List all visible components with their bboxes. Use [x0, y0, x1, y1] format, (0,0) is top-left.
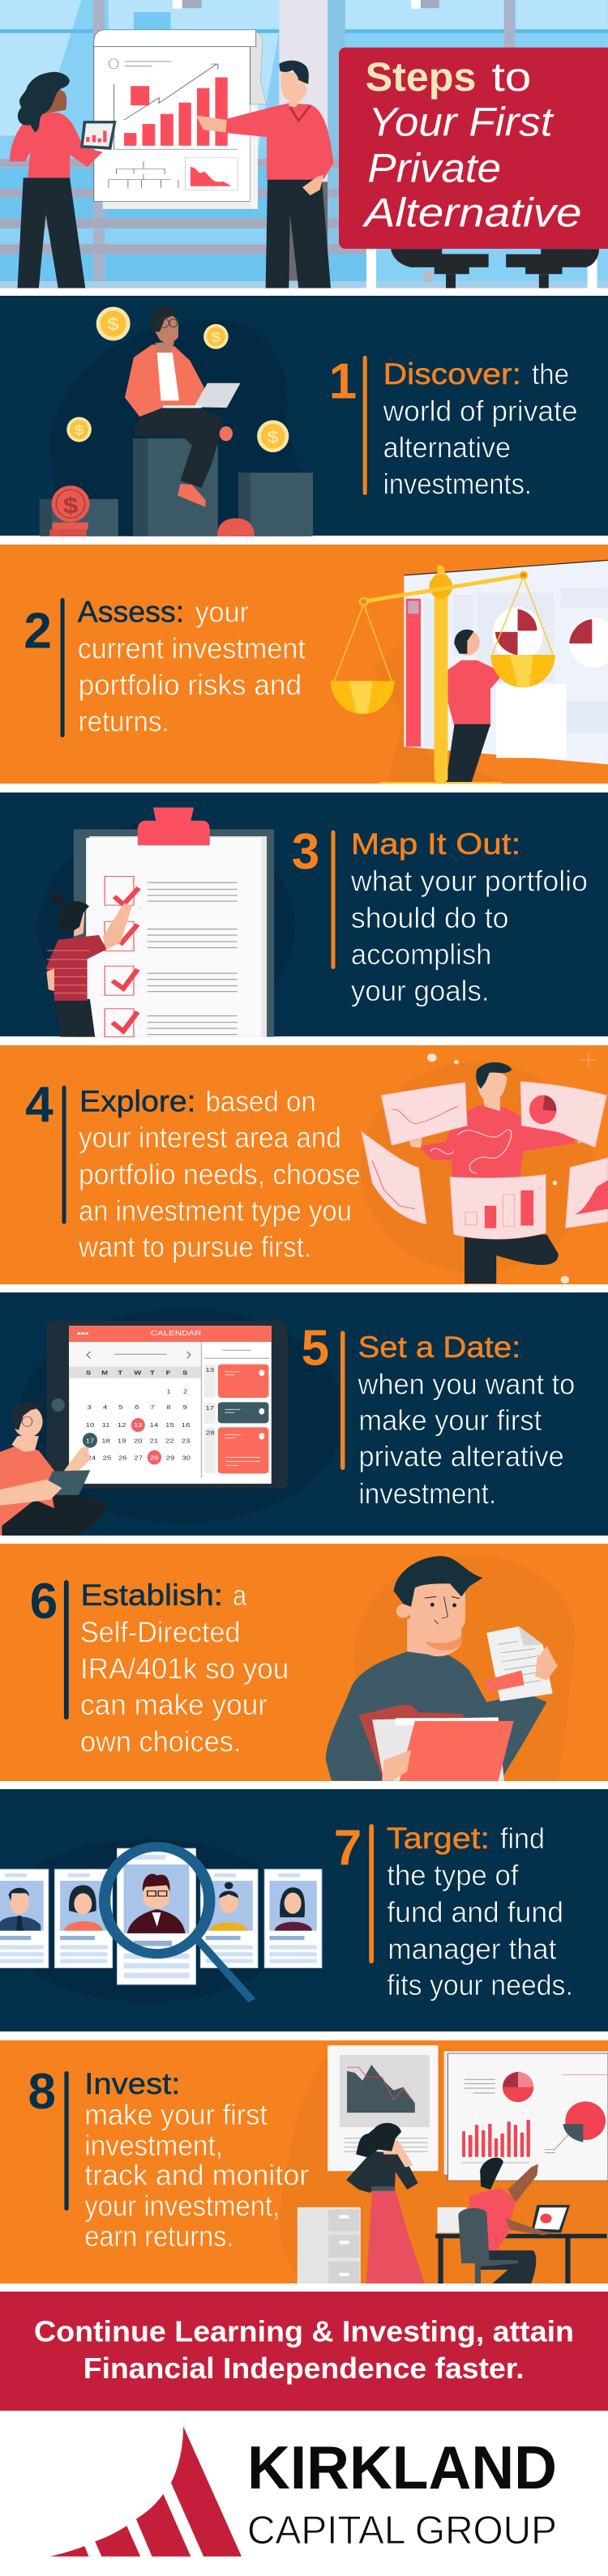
logo: Kirkland Capital Group	[49, 2427, 557, 2557]
calendar dates: 7	[150, 1403, 155, 1411]
text: target	[387, 1822, 573, 2001]
person 2	[64, 1886, 103, 1931]
text: establish: own choices.	[80, 1724, 242, 1758]
divider bar	[363, 356, 367, 495]
calendar dates: 20	[134, 1438, 143, 1444]
calendar day headers: T	[118, 1369, 123, 1376]
calendar dates: 30	[182, 1455, 191, 1461]
heading: title text	[362, 54, 582, 236]
text: explore: your interest area and	[79, 1121, 341, 1154]
divider bar	[62, 1086, 66, 1224]
text: assess: current investment	[78, 632, 306, 665]
text: invest	[84, 2067, 309, 2253]
text: invest: investment,	[84, 2129, 223, 2162]
calendar dates: 4	[103, 1403, 108, 1411]
panel: step 8 invest	[0, 2040, 608, 2283]
calendar dates: 19	[118, 1438, 126, 1444]
number 2: 2	[24, 604, 52, 660]
calendar day headers: M	[101, 1369, 108, 1376]
panel: step 3 map it out	[0, 792, 608, 1037]
illustration: calendar tablet	[0, 1309, 345, 1536]
divider bar	[331, 831, 336, 969]
text: invest: make your first	[84, 2098, 268, 2131]
text: map it out: your goals.	[351, 974, 490, 1007]
text: discover: alternative	[383, 430, 511, 464]
calendar dates: 11	[102, 1421, 110, 1429]
text: discover	[383, 357, 578, 501]
text: explore: want to pursue first.	[78, 1230, 311, 1263]
illustration: calendar tablet: CALENDAR	[151, 1330, 201, 1338]
text: set a date: private alterative	[358, 1440, 564, 1473]
number 5: 5	[302, 1321, 329, 1377]
text: explore: an investment type you	[79, 1194, 352, 1228]
text: set a date: Set a Date:	[358, 1331, 520, 1364]
calendar dates: 10	[86, 1421, 95, 1429]
calendar dates: 6	[135, 1403, 139, 1411]
text: discover: the	[532, 357, 569, 391]
text: establish: IRA/401k so you	[80, 1651, 289, 1685]
number 4: 4	[25, 1077, 54, 1133]
wordmark: KIRKLAND	[247, 2433, 557, 2501]
calendar dates: 3	[87, 1403, 92, 1411]
calendar day headers: T	[150, 1369, 156, 1376]
heading: title text: Private	[367, 145, 501, 190]
text: explore: based on	[206, 1084, 316, 1117]
panel: step 7 target	[0, 1789, 608, 2031]
text: map it out: Map It Out:	[351, 827, 520, 861]
text: assess	[78, 595, 306, 737]
text: closing message	[34, 2314, 574, 2385]
person 1	[0, 1888, 41, 1931]
number 7: 7	[334, 1821, 362, 1877]
text: target: fits your needs.	[387, 1968, 573, 2001]
heading: title text: Your First	[368, 99, 554, 144]
illustration: calendar tablet: 17	[205, 1404, 214, 1412]
text: set a date: make your first	[358, 1403, 542, 1437]
text: establish	[80, 1578, 289, 1758]
person 5	[275, 1887, 312, 1931]
illustration: checklist clipboard	[39, 807, 295, 1037]
text: target: Target:	[387, 1822, 490, 1855]
text: set a date: investment.	[358, 1476, 496, 1510]
text: map it out: should do to	[351, 901, 509, 934]
illustration: man with folders	[326, 1555, 575, 1781]
calendar dates: 15	[165, 1421, 174, 1429]
calendar dates: 8	[166, 1403, 171, 1411]
person center highlighted	[127, 1873, 186, 1933]
calendar dates: 25	[103, 1455, 112, 1461]
calendar dates	[86, 1388, 191, 1461]
calendar dates: 17	[86, 1438, 95, 1444]
calendar dates: 21	[150, 1438, 159, 1444]
illustration: investor on columns with coins: $	[75, 423, 84, 438]
calendar dates: 14	[150, 1421, 159, 1429]
number 1: 1	[329, 354, 357, 410]
text: discover: Discover:	[383, 357, 521, 391]
calendar dates: 2	[183, 1388, 188, 1395]
text: map it out: what your portfolio	[350, 865, 588, 898]
text: establish: Establish:	[81, 1578, 223, 1612]
number 6: 6	[30, 1574, 58, 1630]
panel: step 2 assess	[0, 545, 608, 784]
text: establish: a	[233, 1578, 247, 1612]
icon: chairs	[391, 249, 599, 288]
text: assess: portfolio risks and	[79, 668, 302, 701]
panel: step 4 explore	[0, 1045, 608, 1284]
calendar day headers: S	[86, 1369, 92, 1376]
divider bar	[369, 1824, 374, 1963]
text: invest: track and monitor	[84, 2159, 309, 2192]
illustration: investor on columns with coins: $	[107, 315, 119, 335]
calendar dates: 24	[88, 1455, 96, 1461]
text: target: manager that	[387, 1932, 556, 1966]
divider bar	[64, 1580, 69, 1719]
illustration: office with charts	[279, 2045, 608, 2283]
heading: title text: Steps	[366, 54, 476, 100]
illustration: man with floating charts	[361, 1053, 608, 1284]
text: invest: earn returns.	[84, 2219, 233, 2253]
calendar dates: 5	[118, 1403, 123, 1411]
man at laptop	[458, 2158, 570, 2283]
calendar dates: 16	[182, 1421, 191, 1429]
illustration: profiles and magnifier	[0, 1839, 322, 2002]
text: invest: Invest:	[84, 2067, 180, 2100]
panel: closing call to action	[0, 2292, 608, 2411]
calendar dates: 28	[150, 1455, 159, 1461]
woman with tablet	[10, 72, 116, 288]
text: target: find	[500, 1822, 545, 1855]
calendar day headers: W	[134, 1369, 141, 1376]
calendar dates: 9	[182, 1403, 187, 1411]
text: assess: Assess:	[78, 595, 184, 628]
illustration: investor on columns with coins	[40, 306, 313, 536]
divider bar	[340, 1331, 345, 1470]
text: closing message: Financial Independence faster.	[83, 2352, 525, 2385]
woman viewing chart	[346, 2123, 425, 2283]
calendar dates: 27	[134, 1455, 143, 1461]
divider bar	[64, 2071, 69, 2211]
text: map it out	[350, 827, 588, 1007]
text: map it out: accomplish	[351, 938, 491, 971]
calendar dates: 23	[182, 1438, 191, 1444]
calendar day headers: S	[182, 1369, 188, 1376]
calendar dates: 29	[166, 1455, 175, 1461]
calendar dates: 18	[101, 1438, 110, 1444]
desk	[435, 2234, 607, 2238]
illustration: investor on columns with coins: $	[63, 493, 78, 519]
icon: red mountain mark	[49, 2427, 242, 2557]
text: explore	[78, 1084, 361, 1263]
number 8: 8	[28, 2064, 56, 2120]
text: discover: investments.	[383, 467, 532, 501]
wordmark	[247, 2433, 557, 2553]
text: explore: portfolio needs, choose	[79, 1157, 361, 1191]
illustration: investor on columns with coins: $	[212, 331, 221, 346]
text: discover: world of private	[383, 394, 578, 427]
text: target: fund and fund	[387, 1895, 563, 1929]
heading: title text: to	[491, 54, 531, 100]
text: closing message: Continue Learning & Investing, attain	[34, 2314, 574, 2348]
text: set a date: when you want to	[358, 1367, 575, 1400]
calendar dates: 26	[118, 1455, 127, 1461]
flip chart board	[94, 30, 267, 209]
divider bar	[61, 598, 65, 737]
panel: step 5 set a date	[0, 1292, 608, 1536]
illustration: calendar tablet: 28	[206, 1429, 215, 1436]
text: explore: Explore:	[79, 1084, 196, 1117]
text: establish: Self-Directed	[80, 1615, 240, 1648]
text: assess: returns.	[79, 705, 169, 737]
person 4	[209, 1882, 248, 1931]
panel: hero office illustration	[0, 0, 608, 288]
text: set a date	[358, 1331, 575, 1510]
text: establish: can make your	[80, 1688, 268, 1721]
calendar dates: 12	[118, 1421, 126, 1429]
number 3: 3	[292, 824, 319, 880]
man presenting	[196, 61, 333, 288]
calendar dates: 1	[166, 1388, 171, 1395]
calendar day headers: F	[166, 1369, 171, 1376]
text: target: the type of	[387, 1859, 519, 1891]
calendar dates: 22	[165, 1438, 174, 1444]
wordmark: CAPITAL GROUP	[247, 2509, 557, 2553]
calendar dates: 13	[134, 1421, 143, 1429]
panel: step 1 discover	[0, 296, 608, 536]
text: invest: your investment,	[84, 2189, 280, 2223]
illustration: calendar tablet: 13	[205, 1366, 214, 1373]
panel: step 6 establish	[0, 1544, 608, 1781]
illustration: investor on columns with coins: $	[268, 429, 279, 447]
calendar day headers	[86, 1369, 188, 1376]
heading: title text: Alternative	[362, 190, 582, 236]
panel: title box	[339, 48, 608, 249]
text: assess: your	[195, 595, 249, 628]
illustration: scale and dashboard	[331, 560, 608, 784]
